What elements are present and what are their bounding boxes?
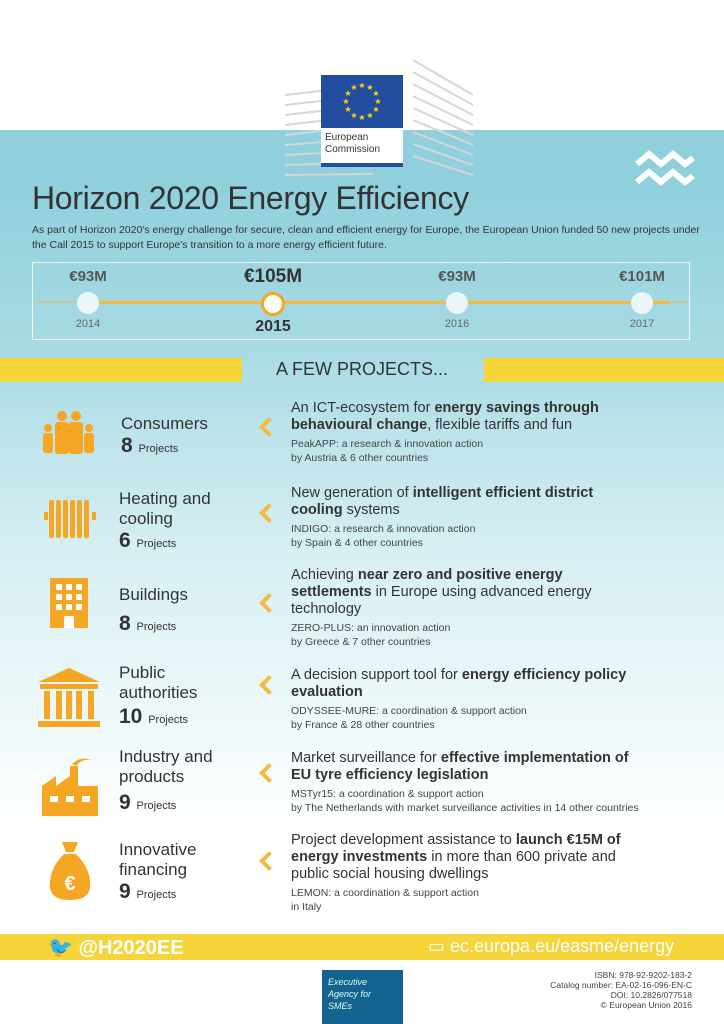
EU flag: ★	[344, 89, 352, 98]
icon: radiator	[44, 500, 96, 538]
2017: 2017	[630, 318, 654, 330]
row: industry: products	[119, 767, 184, 786]
icon: people	[43, 411, 94, 454]
EASME logo: SMEs	[328, 1001, 352, 1011]
icon: factory	[42, 758, 98, 816]
EC logo: European	[325, 132, 368, 143]
row: industry: 9 Projects	[119, 791, 176, 814]
row: consumers	[43, 400, 599, 464]
row: public authorities: ODYSSEE-MURE: a coordination & support action	[291, 705, 527, 717]
row: buildings	[50, 567, 592, 648]
icon: temple	[38, 668, 100, 727]
row: buildings: by Greece & 7 other countries	[291, 636, 430, 648]
legal info: ISBN: 978-92-9202-183-2	[595, 970, 692, 980]
row: industry	[42, 747, 639, 816]
EC logo	[321, 75, 403, 167]
EU flag: ★	[350, 111, 358, 120]
row: heating: Heating and	[119, 489, 211, 508]
EU flag	[321, 75, 403, 128]
row: heating	[44, 485, 594, 552]
icon: money bag	[50, 842, 90, 900]
icon: building	[50, 578, 88, 628]
row: heating: New generation of intelligent efficient district cooling systems	[291, 485, 593, 518]
row: financing: financing	[119, 860, 187, 879]
row: buildings: Buildings	[119, 585, 188, 604]
row: buildings: 8 Projects	[119, 612, 176, 635]
row: financing: 9 Projects	[119, 880, 176, 903]
2014: 2014	[76, 318, 100, 330]
intro text: As part of Horizon 2020's energy challenge for secure, clean and efficient energy for Europe, the European Union funded 50 new projects under the Call 2015 to support Europe's transition to a more energy efficient future.	[32, 224, 700, 251]
row: public authorities: by France & 28 other countries	[291, 719, 435, 731]
row: public authorities: A decision support tool for energy efficiency policy evaluation	[291, 667, 626, 700]
legal info: © European Union 2016	[601, 1000, 692, 1010]
2015: €105M	[244, 266, 302, 287]
row: public authorities: 10 Projects	[119, 705, 188, 728]
2015	[244, 266, 302, 335]
row: heating: INDIGO: a research & innovation action	[291, 523, 475, 535]
2014: €93M	[69, 268, 107, 285]
row: financing: Innovative	[119, 840, 196, 859]
EU flag: ★	[344, 105, 352, 114]
2016	[438, 268, 476, 330]
EC logo: Commission	[325, 144, 380, 155]
timeline	[32, 262, 690, 340]
EASME logo: Executive	[328, 977, 367, 987]
row: public authorities: Public	[119, 663, 165, 682]
row: financing: in Italy	[291, 901, 321, 913]
icon: zigzag	[635, 150, 695, 186]
EU flag: ★	[366, 111, 374, 120]
row: consumers: An ICT-ecosystem for energy savings through behavioural change, flexible tariffs and fun	[291, 400, 599, 433]
EU flag: ★	[358, 81, 366, 90]
EU flag: ★	[366, 83, 374, 92]
EU flag: ★	[372, 89, 380, 98]
building graphic	[284, 59, 473, 176]
row: consumers: 8 Projects	[121, 434, 178, 457]
2015: 2015	[255, 318, 291, 335]
row: consumers: Consumers	[121, 414, 208, 433]
row: buildings: Achieving near zero and positive energy settlements in Europe using advanced energy technology	[291, 567, 592, 617]
row: industry: MSTyr15: a coordination & support action	[291, 788, 484, 800]
section header	[0, 358, 724, 382]
twitter handle: 🐦 @H2020EE	[48, 937, 184, 959]
EU flag: ★	[350, 83, 358, 92]
row: financing: Project development assistance to launch €15M of energy investments in more than 600 private and public social housing dwellings	[291, 832, 621, 882]
row: financing: LEMON: a coordination & support action	[291, 887, 479, 899]
2017: €101M	[619, 268, 665, 285]
2016: 2016	[445, 318, 469, 330]
legal info: Catalog number: EA-02-16-096-EN-C	[550, 980, 692, 990]
EASME logo: Agency for	[328, 989, 371, 999]
legal info	[550, 970, 692, 1010]
2016: €93M	[438, 268, 476, 285]
2017	[619, 268, 665, 330]
row: consumers: by Austria & 6 other countries	[291, 452, 428, 464]
section header: A FEW PROJECTS...	[276, 359, 448, 379]
row: heating: 6 Projects	[119, 529, 176, 552]
legal info: DOI: 10.2826/077518	[611, 990, 692, 1000]
row: public authorities: authorities	[119, 683, 197, 702]
row: industry: by The Netherlands with market surveillance activities in 14 other countries	[291, 802, 639, 814]
EU flag: ★	[342, 97, 350, 106]
EU flag: ★	[358, 113, 366, 122]
row: industry: Industry and	[119, 747, 213, 766]
row: heating: cooling	[119, 509, 173, 528]
website: ▭ ec.europa.eu/easme/energy	[428, 936, 674, 956]
EU flag: ★	[372, 105, 380, 114]
footer bar	[0, 934, 724, 960]
title: Horizon 2020 Energy Efficiency	[32, 180, 469, 216]
row: financing	[50, 832, 621, 913]
row: industry: Market surveillance for effective implementation of EU tyre efficiency legislation	[291, 750, 629, 783]
row: buildings: ZERO-PLUS: an innovation action	[291, 622, 450, 634]
EU flag: ★	[374, 97, 382, 106]
EASME logo	[322, 970, 403, 1024]
row: public authorities	[38, 663, 626, 731]
row: consumers: PeakAPP: a research & innovation action	[291, 438, 483, 450]
icon: money bag: €	[64, 873, 76, 895]
2014	[69, 268, 107, 330]
row: heating: by Spain & 4 other countries	[291, 537, 423, 549]
